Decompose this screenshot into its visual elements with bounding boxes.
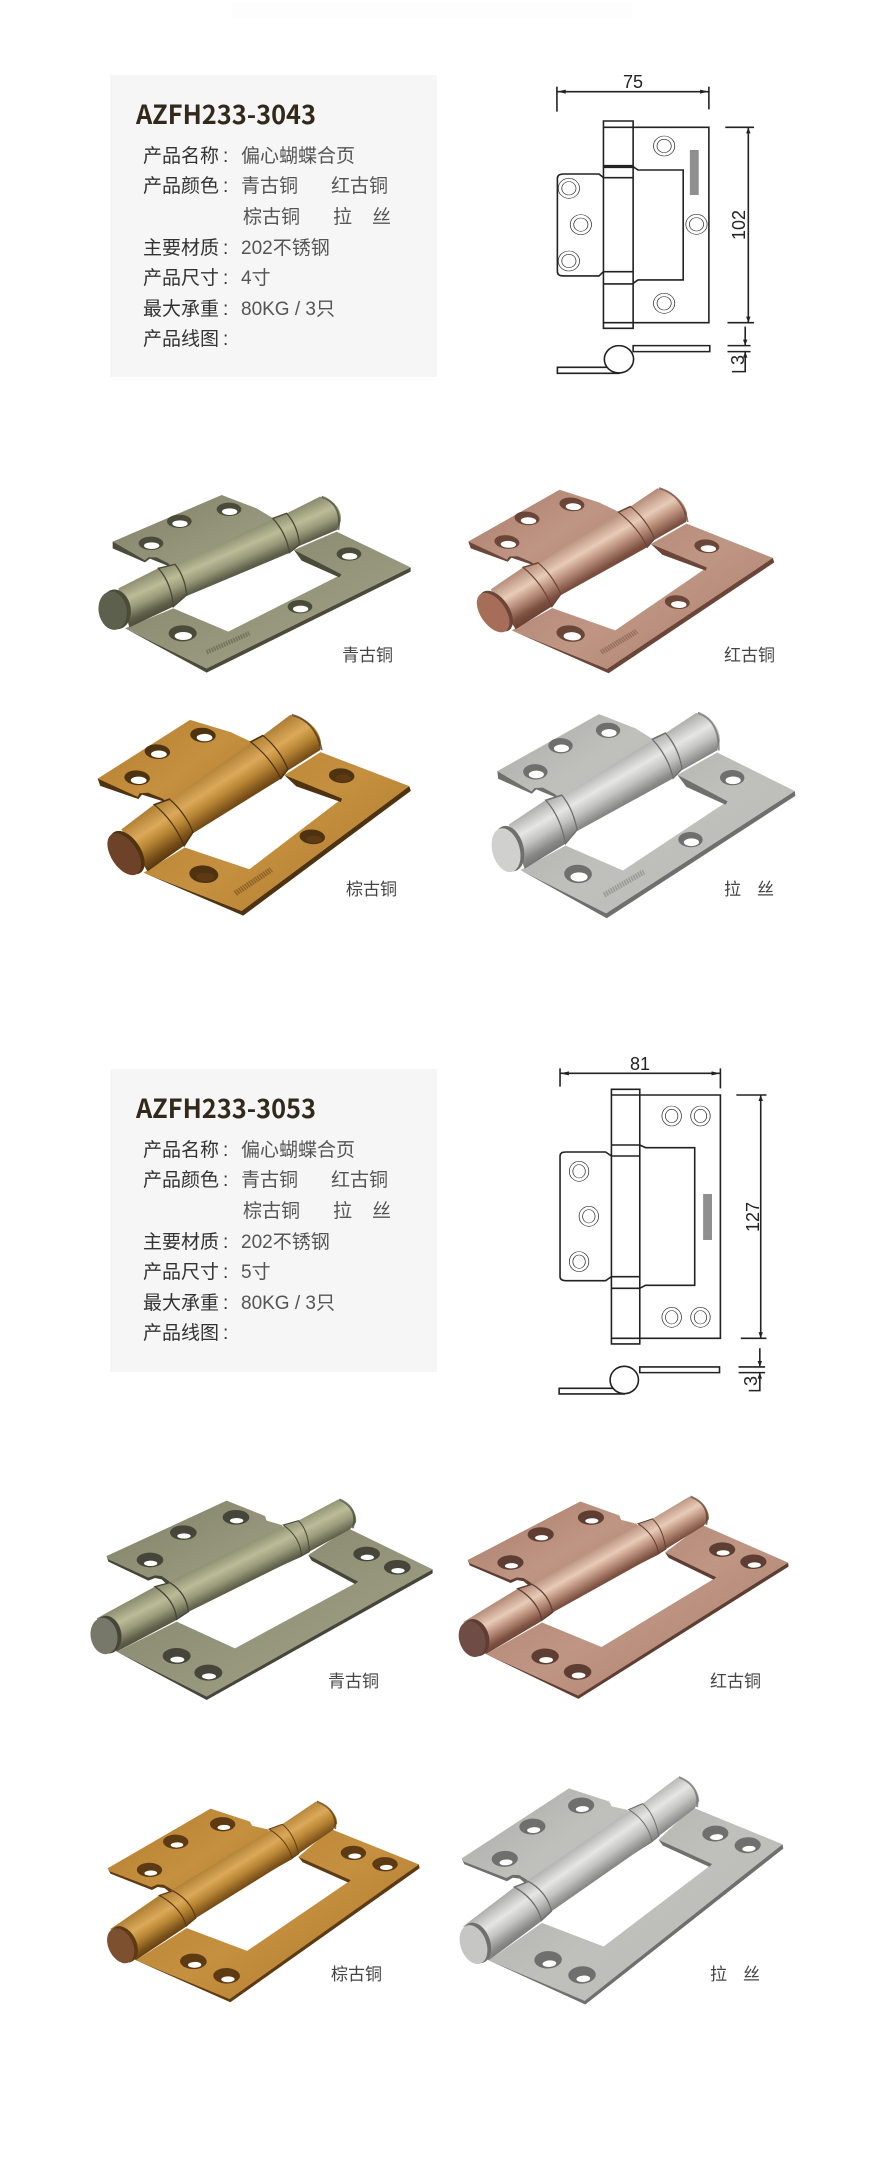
spec: product colours line 2: 拉 [333, 206, 352, 228]
caption: red bronze: 红古铜 [710, 1672, 761, 1691]
spec: product colours line 2: 丝 [372, 1200, 391, 1222]
spec: product colours line 1: 产品颜色: [143, 176, 228, 197]
caption: brushed steel: 丝 [757, 880, 774, 899]
spec: size: 4寸 [241, 267, 271, 289]
spec: size: 产品尺寸: [143, 268, 228, 289]
dimension: 3: 3 [741, 1376, 761, 1386]
product photo: brown bronze hinge 4in [62, 707, 450, 923]
spec: line drawing label: 产品线图: [143, 1322, 228, 1344]
heading: model number: AZFH233-3043 [135, 95, 316, 132]
product photo: red bronze hinge 4in [435, 483, 811, 677]
product photo: green bronze hinge 4in [96, 495, 411, 673]
caption: green bronze: 青古铜 [328, 1672, 379, 1691]
spec: product colours line 1: 青古铜 [241, 1169, 298, 1191]
product photo: brushed steel hinge 5in [433, 1769, 806, 2015]
spec: product name: 偏心蝴蝶合页 [241, 145, 355, 167]
caption: red bronze: 红古铜 [724, 646, 775, 665]
dimension: 75: 75 [623, 72, 643, 92]
spec: line drawing label: 产品线图: [143, 328, 228, 350]
spec: material: 202不锈钢 [241, 1231, 330, 1253]
spec: product name: 偏心蝴蝶合页 [241, 1139, 355, 1161]
spec: product name: 产品名称: [143, 146, 228, 167]
product photo: brown bronze hinge 5in [79, 1797, 444, 2008]
spec: material: 202不锈钢 [241, 237, 330, 259]
caption: brown bronze: 棕古铜 [346, 880, 397, 899]
panel: AZFH233-3043 specification [110, 75, 437, 377]
panel background [110, 75, 437, 377]
panel: AZFH233-3053 specification [110, 1069, 437, 1372]
spec: max load: 最大承重: [143, 1293, 228, 1314]
dimension: 81: 81 [630, 1054, 650, 1074]
product photo: red bronze hinge 5in [444, 1494, 800, 1703]
product photo: brushed steel hinge 4in [474, 708, 808, 922]
spec: material: 主要材质: [143, 238, 228, 259]
spec: product colours line 2: 丝 [372, 206, 391, 228]
panel background [110, 1069, 437, 1372]
spec: material: 主要材质: [143, 1232, 228, 1253]
caption: brushed steel: 拉 [710, 1965, 727, 1984]
spec: product colours line 1: 青古铜 [241, 175, 298, 197]
line drawing: 3043 hinge with dimensions [557, 72, 754, 373]
spec: product name: 产品名称: [143, 1140, 228, 1161]
dimension: 3: 3 [728, 355, 748, 365]
spec: size: 5寸 [241, 1261, 271, 1283]
dimension: 102: 102 [729, 210, 749, 240]
caption: brushed steel: 拉 [724, 880, 741, 899]
spec: max load: 80KG / 3只 [241, 1293, 335, 1314]
line drawing: 3053 hinge with dimensions [559, 1054, 766, 1394]
spec: product colours line 2: 拉 [333, 1200, 352, 1222]
product photo: green bronze hinge 5in [88, 1499, 433, 1700]
spec: product colours line 2: 棕古铜 [243, 207, 300, 228]
spec: product colours line 1: 红古铜 [331, 175, 388, 197]
spec: max load: 80KG / 3只 [241, 299, 335, 320]
caption: green bronze: 青古铜 [342, 646, 393, 665]
spec: product colours line 1: 红古铜 [331, 1169, 388, 1191]
spec: size: 产品尺寸: [143, 1262, 228, 1283]
spec: product colours line 2: 棕古铜 [243, 1201, 300, 1222]
spec: product colours line 1: 产品颜色: [143, 1170, 228, 1191]
heading: model number: AZFH233-3053 [135, 1089, 316, 1126]
caption: brushed steel: 丝 [743, 1965, 760, 1984]
dimension: 127: 127 [743, 1202, 763, 1232]
caption: brown bronze: 棕古铜 [331, 1965, 382, 1984]
spec: max load: 最大承重: [143, 299, 228, 320]
